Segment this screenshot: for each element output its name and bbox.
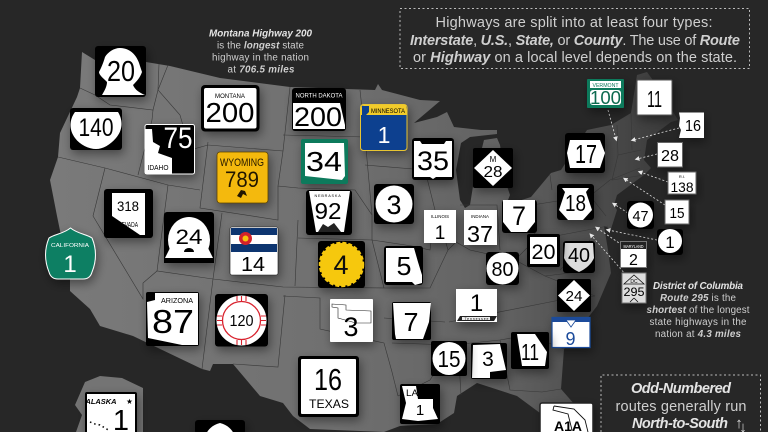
sign: Minnesota 1: 1 [378, 122, 390, 148]
sign: Alaska 1 [85, 392, 137, 432]
sign: Nevada 318: NEVADA [118, 222, 138, 229]
sign: North Carolina 24 [557, 279, 591, 312]
sign: Tennessee 1: Tennessee [464, 317, 489, 321]
sign: Illinois 1: 1 [435, 223, 445, 244]
panel: odd-numbered routes: Odd-Numbered [631, 381, 732, 397]
sign: West Virginia 20 [527, 234, 560, 267]
sign: Missouri 5 [384, 246, 423, 285]
sign: Louisiana 1: 1 [416, 402, 424, 419]
sign: Rhode Island 138: R.I. [679, 174, 685, 179]
sign: West Virginia 20: 20 [532, 241, 556, 264]
panel: odd-numbered routes: North-to-South [632, 416, 728, 432]
sign: Maine 11 [637, 80, 672, 115]
sign: Alabama 3 [471, 343, 507, 379]
sign: Wyoming 789: 789 [225, 167, 259, 192]
sign: Oklahoma 3: 3 [344, 312, 358, 342]
sign: DC 295 [622, 273, 646, 303]
sign: New Mexico 120 [215, 294, 268, 346]
sign: Nebraska 92: 92 [314, 198, 342, 224]
sign: North Dakota 200 [292, 88, 346, 132]
sign: Colorado 14: 14 [241, 254, 265, 276]
sign: Georgia 11: 11 [521, 339, 539, 365]
sign: Michigan 28 [473, 148, 513, 188]
sign: Washington 20 [95, 46, 146, 97]
sign: Louisiana 1: LA [406, 388, 418, 398]
panel: odd-numbered routes [601, 375, 760, 432]
sign: Virginia 40: 40 [568, 245, 590, 267]
callout: Montana Highway 200 [209, 28, 313, 76]
sign: Arizona 87 [146, 292, 199, 346]
sign: New Jersey 47 [627, 201, 654, 229]
sign: Arizona 87: 87 [152, 303, 194, 340]
sign: Connecticut 15 [665, 200, 689, 224]
sign: Wisconsin 35 [412, 138, 454, 180]
sign: Arkansas 7 [392, 302, 431, 340]
callout: Montana Highway 200: Montana Highway 200 [209, 28, 313, 40]
sign: Alaska 1: ★ [126, 397, 133, 406]
sign: Wyoming 789 [217, 152, 268, 203]
sign: Maryland 2: MARYLAND [624, 244, 644, 249]
sign: Montana 200: MONTANA [215, 93, 246, 100]
sign: Vermont 100: VERMONT [592, 83, 619, 89]
sign: Arizona 87: ARIZONA [161, 298, 193, 305]
panel: odd-numbered routes: routes generally run [616, 399, 746, 415]
sign: South Dakota 34 [301, 139, 348, 184]
sign: Nebraska 92 [306, 190, 352, 235]
sign: Michigan 28: M [490, 155, 497, 164]
sign: DC 295: 295 [624, 285, 645, 299]
sign: Mississippi 15: 15 [438, 346, 460, 372]
callout: DC Route 295: shortest of the longest [646, 305, 750, 316]
sign: North Dakota 200: 200 [294, 102, 342, 132]
sign: Pennsylvania 18 [557, 184, 594, 220]
sign: Colorado 14 [230, 227, 278, 276]
sign: Delaware 1: 1 [665, 233, 675, 252]
sign: Wisconsin 35: 35 [417, 146, 449, 176]
sign: Arkansas 7: 7 [404, 307, 418, 337]
sign: Kansas 4: 4 [333, 250, 349, 280]
sign: Missouri 5: 5 [396, 251, 412, 281]
sign: Mississippi 15 [431, 341, 467, 376]
sign: Oregon 140: 140 [78, 114, 114, 142]
callout: DC Route 295: Route 295 is the [660, 293, 737, 304]
sign: Oregon 140 [70, 108, 122, 150]
sign: Indiana 37: 37 [467, 221, 493, 247]
sign: Rhode Island 138: 138 [670, 179, 694, 195]
callout: DC Route 295: state highways in the [650, 317, 747, 328]
sign: Kentucky 80 [486, 252, 519, 285]
sign: Tennessee 1: 1 [470, 290, 483, 317]
sign: Texas 16: TEXAS [309, 397, 349, 411]
sign: Vermont 100: 100 [590, 88, 621, 108]
sign: Pennsylvania 18: 18 [565, 190, 586, 216]
callout: Montana Highway 200: at 706.5 miles [228, 64, 295, 76]
sign: Tennessee 1 [456, 289, 497, 322]
sign: California 1: 1 [63, 251, 77, 278]
panel: highway types [400, 8, 750, 68]
sign: Virginia 40 [563, 241, 595, 273]
sign: Florida A1A [540, 403, 593, 432]
sign: California 1: CALIFORNIA [51, 243, 89, 249]
arrows: northeast pointers [591, 110, 679, 275]
sign: DC 295: DC [630, 279, 638, 285]
sign: New Jersey 47: 47 [632, 208, 648, 225]
sign: Massachusetts 28: 28 [661, 148, 679, 165]
sign: Utah 24: 24 [176, 226, 203, 249]
sign: Hawaii [195, 420, 245, 432]
sign: Nevada 318: 318 [117, 198, 139, 214]
sign: Texas 16: 16 [314, 362, 342, 397]
callout: Montana Highway 200: highway in the nation [212, 52, 309, 64]
sign: Delaware 1 [657, 229, 683, 255]
sign: Georgia 11 [511, 332, 549, 369]
sign: Rhode Island 138 [668, 172, 696, 195]
sign: North Carolina 24: 24 [566, 288, 582, 305]
sign: Indiana 37 [464, 210, 497, 247]
sign: South Carolina 9 [552, 318, 590, 349]
sign: Idaho 75: 75 [164, 122, 192, 155]
sign: Louisiana 1 [400, 384, 440, 424]
sign: North Dakota 200: NORTH DAKOTA [296, 92, 343, 100]
sign: Maryland 2 [620, 242, 646, 269]
sign: New Hampshire 16 [679, 112, 704, 138]
sign: Massachusetts 28 [658, 142, 682, 167]
sign: South Carolina 9: 9 [565, 329, 576, 349]
sign: Wyoming 789: WYOMING [220, 157, 264, 169]
sign: Ohio 7: 7 [512, 201, 526, 231]
sign: Alaska 1: ALASKA [85, 397, 116, 406]
sign: Illinois 1: ILLINOIS [431, 214, 449, 219]
panel: odd-numbered routes: ↑ [735, 415, 743, 432]
sign: New York 17: 17 [575, 139, 597, 169]
sign: Oklahoma 3 [330, 299, 373, 342]
panel: highway types: or Highway on a local level depends on the state. [413, 50, 737, 66]
sign: New Mexico 120: 120 [230, 313, 254, 330]
sign: Minnesota 1 [360, 104, 407, 150]
callout: DC Route 295: nation at 4.3 miles [655, 329, 742, 340]
callout: Montana Highway 200: is the longest state [217, 40, 305, 52]
panel: highway types: Interstate, U.S., State, or County. The use of Route [410, 33, 740, 49]
callout: DC Route 295: District of Columbia [653, 281, 744, 292]
sign: New Hampshire 16: 16 [685, 118, 701, 135]
sign: Idaho 75 [145, 122, 194, 174]
sign: Iowa 3: 3 [386, 190, 402, 220]
sign: Connecticut 15: 15 [670, 205, 684, 222]
sign: Ohio 7 [502, 200, 537, 233]
panel: highway types: Highways are split into at least four types: [436, 15, 712, 31]
sign: Vermont 100 [587, 79, 624, 108]
callout: DC Route 295 [646, 281, 750, 340]
sign: Idaho 75: IDAHO [148, 163, 169, 172]
sign: Texas 16 [298, 356, 359, 417]
sign: Maryland 2: 2 [629, 252, 638, 269]
sign: Utah 24 [164, 212, 214, 263]
sign: Washington 20: 20 [107, 56, 135, 88]
sign: Nevada 318 [104, 189, 153, 238]
sign: South Dakota 34: 34 [306, 146, 342, 177]
sign: Kansas 4 [318, 241, 365, 288]
map: Alaska [75, 376, 143, 432]
sign: Kentucky 80: 80 [492, 259, 514, 281]
sign: California 1 [46, 228, 95, 279]
sign: Indiana 37: INDIANA [471, 214, 489, 219]
sign: Illinois 1 [424, 210, 456, 244]
sign: Maine 11: 11 [647, 86, 662, 112]
map: contiguous United States [50, 52, 678, 432]
state borders [58, 64, 644, 396]
sign: Alabama 3: 3 [482, 348, 494, 371]
sign: Montana 200: 200 [206, 97, 254, 128]
sign: Iowa 3 [374, 184, 414, 224]
sign: Minnesota 1: MINNESOTA [371, 108, 406, 115]
sign: Michigan 28: 28 [484, 164, 503, 181]
sign: Nebraska 92: NEBRASKA [314, 194, 342, 198]
sign: Montana 200 [201, 85, 260, 132]
sign: New York 17 [565, 133, 605, 173]
